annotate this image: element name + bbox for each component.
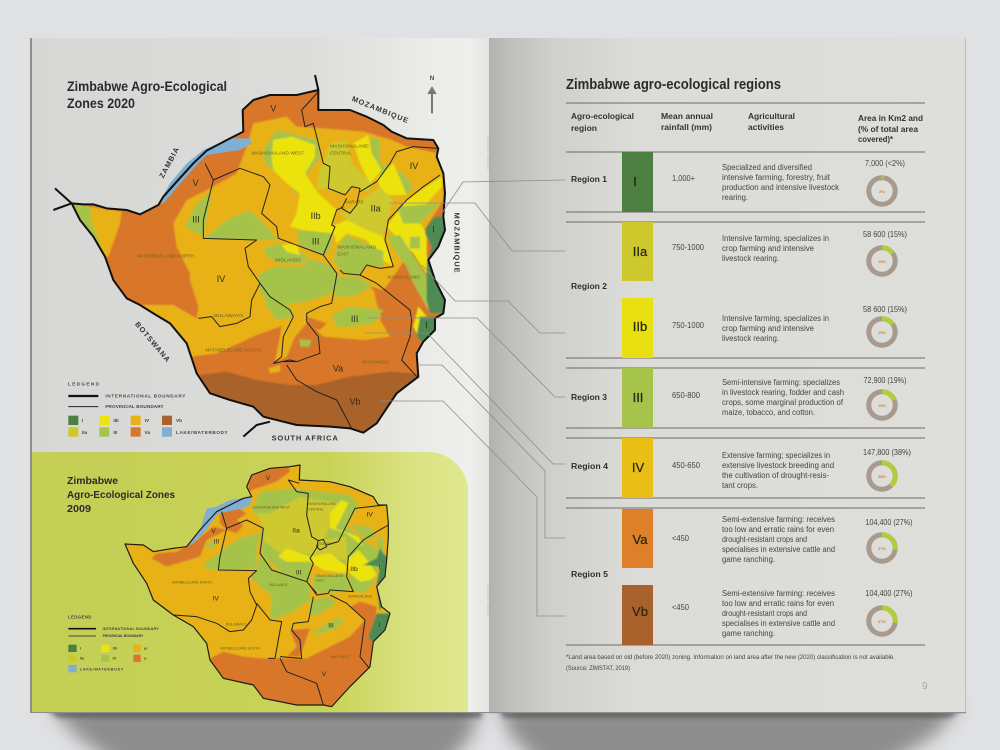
province labels 2020 (137, 144, 420, 366)
country label: Mozambique east: MOZAMBIQUE (452, 213, 461, 274)
row: region III (571, 368, 907, 428)
row: region III: 19% (878, 403, 886, 408)
footnote (566, 654, 895, 672)
label: region 5: Region 5 (571, 569, 608, 579)
row: region IIa (622, 222, 907, 281)
row: region Vb: specialises in extensive cattle and (722, 619, 835, 628)
row: region I: production and intensive livestock (722, 183, 840, 192)
zone labels 2020: IIb (311, 211, 321, 221)
zone labels 2009: III (214, 538, 219, 545)
zone labels 2009: III (328, 622, 334, 629)
row: region III: in livestock rearing, fodder and cash (722, 388, 844, 397)
title: zones 2009: Agro-Ecological Zones (67, 489, 175, 501)
legend 2020: III (113, 430, 117, 435)
row: region IV: 450-650 (672, 461, 701, 470)
zone labels 2020: Va (333, 363, 343, 373)
legend 2020: I (82, 418, 83, 423)
title: zones 2020 (67, 79, 227, 111)
table header: Agro-ecological (571, 111, 634, 121)
zone labels 2020: IV (410, 161, 418, 171)
row: region IIb: crop farming and intensive (722, 324, 815, 333)
row: region IIa: 58 600 (15%) (863, 230, 907, 239)
label: region 2: Region 2 (571, 281, 607, 291)
legend 2009 (68, 614, 159, 672)
province labels 2009: MATABELELAND SOUTH (220, 647, 260, 651)
row: region I: I (633, 174, 637, 189)
row: region III: maize, tobacco, and cotton. (722, 408, 815, 417)
zone labels 2020: V (193, 178, 199, 188)
international boundary 2020 (53, 75, 445, 437)
legend 2009: LAKE/WATERBODY (80, 667, 124, 671)
row: region Vb: 27% (878, 619, 886, 624)
row: region I: 7,000 (<2%) (865, 159, 905, 168)
row: region Vb: game ranching. (722, 629, 775, 638)
zone labels 2020: IV (217, 274, 225, 284)
row: region Vb: Vb (632, 604, 648, 619)
row: region Vb: drought-resistant crops and (722, 609, 807, 618)
row: region I: intensive farming, forestry, fruit (722, 173, 831, 182)
row: region IIb: 58 600 (15%) (863, 305, 907, 314)
zone labels 2020: III (351, 314, 358, 324)
row: region Vb (622, 585, 913, 645)
footnote: (Source: ZIMSTAT, 2019) (566, 665, 630, 672)
row: region IIa: Intensive farming, specializes in (722, 234, 829, 243)
zone labels 2020: I (425, 320, 428, 330)
table header: region (571, 123, 597, 133)
zone labels 2020: V (270, 103, 276, 113)
right page (489, 38, 966, 713)
legend 2009: I (80, 646, 81, 650)
title: zones 2009: 2009 (67, 503, 91, 515)
row: region I (571, 152, 905, 212)
province labels 2020: HARARE (345, 199, 364, 205)
province labels 2009: HARARE (319, 542, 332, 546)
legend 2009: III (113, 657, 116, 661)
book shadow (46, 705, 962, 750)
legend 2020: Va (145, 430, 151, 435)
table header: Area in Km2 and (858, 113, 923, 123)
row: region Va: 27% (878, 546, 886, 551)
row: region I: 1,000+ (672, 174, 695, 183)
row: region III: Region 3 (571, 392, 607, 402)
province labels 2020: EAST (337, 251, 349, 257)
zone fills 2009 (120, 460, 397, 713)
row: region IV (571, 438, 911, 498)
row: region Vb: too low and erratic rains for even (722, 599, 834, 608)
legend 2009: IIa (80, 656, 85, 660)
province labels 2020: MANICALAND (387, 274, 420, 280)
legend 2009: V (144, 657, 147, 661)
legend 2020: INTERNATIONAL BOUNDARY (105, 394, 186, 399)
table header: Mean annual (661, 111, 713, 121)
zone labels 2020: III (192, 214, 200, 224)
row: region IIb: Intensive farming, specializes in (722, 314, 829, 323)
zone labels 2020: III (312, 236, 319, 246)
province labels 2009: MASVINGO (331, 655, 350, 659)
table header (571, 111, 923, 144)
country label: South Africa: SOUTH AFRICA (272, 434, 339, 443)
legend 2020: PROVINCIAL BOUNDARY (105, 404, 165, 409)
row: region IV: 38% (878, 474, 886, 479)
legend 2009: IIb (113, 646, 118, 650)
zone labels 2009: I (378, 622, 380, 629)
country label: Botswana: BOTSWANA (133, 320, 173, 364)
province labels 2009: MASHONALAND (316, 574, 344, 578)
table header: covered)* (858, 134, 894, 144)
row: region Va: drought-resistant crops and (722, 535, 807, 544)
north arrow: N (430, 76, 434, 82)
row: region III: Semi-intensive farming: specializes (722, 378, 840, 387)
row: region Va: specialises in extensive cattle and (722, 545, 835, 554)
province labels 2009: MIDLANDS (269, 583, 288, 587)
row: region IIa: IIa (633, 244, 648, 259)
zone labels 2009: III (296, 569, 302, 576)
province labels 2009: BULAWAYO (226, 623, 247, 627)
zone labels 2020 (192, 103, 435, 406)
table header: activities (748, 122, 784, 132)
zone labels 2009: I (379, 564, 381, 571)
province labels 2009: MANICALAND (348, 594, 373, 598)
table rules (566, 103, 925, 645)
province labels 2020: MATABELELAND NORTH (137, 254, 194, 260)
province labels 2020: MASVINGO (362, 360, 389, 366)
legend 2020: IIa (82, 430, 88, 435)
row: region Va: 104,400 (27%) (866, 518, 913, 527)
row: region Vb: 104,400 (27%) (866, 589, 913, 598)
zone labels 2009: IIa (292, 528, 300, 535)
province labels 2020: MASHONALAND (330, 144, 369, 150)
page number: 9 (922, 681, 928, 692)
row: region IIb: IIb (633, 319, 647, 334)
row: region Va: Va (633, 532, 648, 547)
legend 2020: LAKE/WATERBODY (176, 430, 229, 435)
row: region IIb (622, 298, 907, 358)
province labels 2020: MATABELELAND SOUTH (205, 347, 261, 353)
panel: 2009 map background (32, 452, 468, 712)
map: Zimbabwe zones 2009 (68, 460, 397, 713)
province labels 2009: CENTRAL (308, 507, 324, 511)
row: region Vb: <450 (672, 603, 690, 612)
legend 2020: IV (145, 418, 150, 423)
province labels 2020: MASHONALAND (337, 245, 376, 251)
legend 2020: Vb (176, 418, 182, 423)
row: region IV: tant crops. (722, 481, 758, 490)
lake/waterbody 2009 (187, 497, 252, 547)
row: region I: rearing. (722, 193, 748, 202)
row: region Va: game ranching. (722, 555, 775, 564)
row: region IV: 147,800 (38%) (863, 448, 911, 457)
title: zones 2009 (67, 475, 175, 515)
row: region Va: Semi-extensive farming: receives (722, 515, 835, 524)
province labels 2009: MASHONALAND WEST (253, 505, 291, 509)
zone labels 2020: IIa (371, 204, 381, 214)
table header: Agricultural (748, 111, 795, 121)
international boundary 2009 (125, 465, 390, 707)
province labels 2009: EAST (316, 578, 325, 582)
legend 2020: IIb (113, 418, 119, 423)
legend 2009: IV (144, 647, 148, 651)
row: region IIa: 15% (878, 259, 886, 264)
row: region I: Specialized and diversified (722, 163, 812, 172)
row: region IIb: 750-1000 (672, 321, 705, 330)
row: region III: crops, some marginal production of (722, 398, 844, 407)
row: region IV: the cultivation of drought-resis- (722, 471, 829, 480)
footnote: *Land area based on old (before 2020) zoning. Information on land area after the new (2020) classification is not available. (566, 654, 895, 661)
row: region IIa: crop farming and intensive (722, 244, 815, 253)
provincial boundaries 2009 (173, 480, 388, 705)
province labels 2009 (172, 502, 373, 659)
country label: Zambia: ZAMBIA (157, 145, 181, 180)
row: region IV: Region 4 (571, 461, 608, 471)
table header: rainfall (mm) (661, 122, 712, 132)
legend 2020: LEDGEND (68, 382, 100, 387)
row: region Va: too low and erratic rains for even (722, 525, 834, 534)
leader lines (365, 180, 565, 616)
legend 2020 (68, 382, 229, 437)
row: region IIa: 750-1000 (672, 243, 705, 252)
row: region III: 650-800 (672, 391, 701, 400)
legend 2009: LEDGEND (68, 614, 91, 619)
title: zones 2009: Zimbabwe (67, 475, 118, 487)
row: region I: Region 1 (571, 174, 607, 184)
legend 2009: INTERNATIONAL BOUNDARY (103, 627, 159, 631)
lake/waterbody 2020 (158, 138, 252, 203)
province labels 2009: MASHONALAND (308, 502, 336, 506)
row: region I: 2% (879, 189, 885, 194)
row: region Va (622, 509, 913, 568)
zone labels 2009: V (322, 671, 327, 678)
zone labels 2020: I (432, 224, 435, 234)
zone labels 2020: Vb (349, 396, 360, 406)
zone labels 2009: IV (213, 596, 219, 603)
provincial boundaries 2020 (198, 92, 440, 428)
spine staples (487, 135, 489, 617)
row: region IV: Extensive farming; specializes in (722, 451, 830, 460)
row: region Vb: Semi-extensive farming: receives (722, 589, 835, 598)
zone labels 2009 (211, 475, 381, 678)
row: region IV: IV (632, 460, 644, 475)
row: region IIa: livestock rearing. (722, 254, 779, 263)
province labels 2020: MIDLANDS (275, 257, 301, 263)
row: region III: III (633, 390, 643, 405)
row: region IIb: 15% (878, 330, 886, 335)
zone labels 2009: IV (367, 511, 373, 518)
province labels 2009: MATABELELAND NORTH (172, 580, 212, 584)
heading: agro-ecological regions: Zimbabwe agro-ecological regions (566, 77, 781, 93)
province labels 2020: BULAWAYO (214, 313, 243, 319)
row: region Va: <450 (672, 534, 690, 543)
title: zones 2020: Zones 2020 (67, 96, 135, 111)
zone fills 2020 (74, 92, 444, 432)
zone labels 2009: V (266, 475, 271, 482)
map: Zimbabwe zones 2020 (50, 73, 461, 443)
province labels 2020: CENTRAL (330, 151, 352, 157)
table header: (% of total area (858, 124, 918, 134)
legend 2009: PROVINCIAL BOUNDARY (103, 634, 144, 638)
country label: Mozambique north: MOZAMBIQUE (351, 94, 410, 125)
zone labels 2009: IIb (350, 566, 358, 573)
row: region IIb: livestock rearing. (722, 334, 779, 343)
left page (30, 38, 489, 713)
north arrow (427, 76, 437, 113)
title: zones 2020: Zimbabwe Agro-Ecological (67, 79, 227, 94)
province labels 2020: MASHONALAND WEST (252, 150, 304, 156)
row: region III: 72,900 (19%) (864, 376, 907, 385)
zone labels 2009: V (211, 528, 216, 535)
row: region IV: extensive livestock breeding and (722, 461, 834, 470)
